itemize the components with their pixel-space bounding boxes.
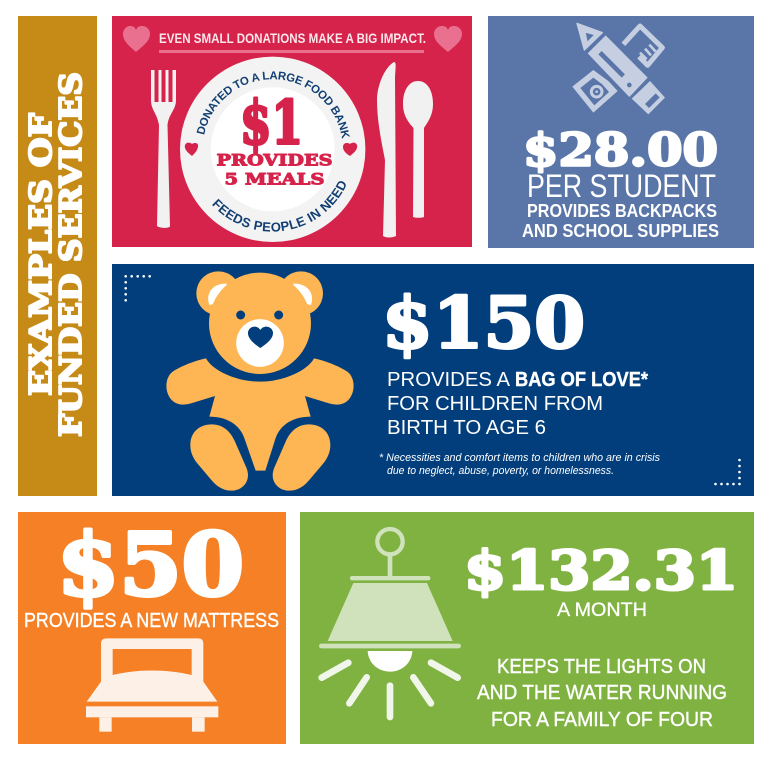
icon: plate heart right bbox=[343, 143, 357, 156]
per student: PER STUDENT bbox=[527, 168, 716, 204]
panel: sidebar bbox=[18, 16, 97, 496]
sidebar heading: EXAMPLES OF bbox=[24, 113, 59, 396]
amount: $150 bbox=[382, 282, 585, 364]
amount: $1 bbox=[240, 88, 303, 158]
footnote: * Necessities and comfort items to children who are in crisis bbox=[379, 452, 660, 464]
provides 5 meals: PROVIDES bbox=[216, 150, 332, 170]
description: PROVIDES A NEW MATTRESS bbox=[24, 610, 279, 632]
panel: utilities bbox=[300, 512, 754, 744]
description: FOR CHILDREN FROM bbox=[387, 393, 603, 415]
icon: plate heart left bbox=[185, 143, 198, 156]
panel: school supplies bbox=[488, 16, 754, 248]
description: FOR A FAMILY OF FOUR bbox=[491, 709, 713, 731]
provides 5 meals: 5 MEALS bbox=[224, 170, 324, 188]
description: PROVIDES A bbox=[387, 369, 511, 391]
icon: hanging lamp bbox=[319, 529, 461, 717]
a month: A MONTH bbox=[557, 600, 647, 621]
footnote: due to neglect, abuse, poverty, or homelessness. bbox=[387, 465, 614, 477]
description: BAG OF LOVE* bbox=[515, 369, 648, 391]
amount: $28.00 bbox=[523, 124, 718, 176]
icon: knife bbox=[377, 62, 396, 238]
icon: fork bbox=[151, 70, 176, 228]
icon: pencil and ruler bbox=[572, 23, 665, 114]
description: BIRTH TO AGE 6 bbox=[387, 417, 546, 439]
icon: spoon bbox=[403, 81, 433, 218]
decorative dots bottom right bbox=[714, 459, 741, 485]
heading: EVEN SMALL DONATIONS MAKE A BIG IMPACT. bbox=[159, 30, 426, 46]
description: AND SCHOOL SUPPLIES bbox=[522, 221, 719, 241]
sidebar heading bbox=[24, 72, 89, 437]
description: AND THE WATER RUNNING bbox=[477, 682, 727, 704]
plate bottom text: FEEDS PEOPLE IN NEED bbox=[212, 181, 346, 232]
icon: right heart bbox=[434, 26, 462, 52]
panel: mattress bbox=[18, 512, 286, 744]
footnote bbox=[379, 452, 660, 477]
plate top text: DONATED TO A LARGE FOOD BANK bbox=[196, 71, 350, 139]
amount: $132.31 bbox=[464, 540, 738, 602]
icon: teddy bear bbox=[166, 271, 354, 491]
panel: bag of love bbox=[112, 264, 754, 496]
provides 5 meals bbox=[216, 150, 332, 188]
description bbox=[522, 201, 719, 241]
description: PROVIDES BACKPACKS bbox=[527, 201, 717, 221]
description bbox=[387, 369, 648, 439]
description: KEEPS THE LIGHTS ON bbox=[497, 656, 706, 678]
sidebar heading: FUNDED SERVICES bbox=[54, 72, 89, 437]
description bbox=[477, 656, 727, 731]
decorative dots top left bbox=[124, 275, 151, 302]
panel: one dollar meals bbox=[112, 16, 472, 247]
plate bbox=[180, 56, 366, 242]
amount: $50 bbox=[57, 515, 244, 616]
icon: bed bbox=[86, 638, 218, 732]
icon: left heart bbox=[123, 26, 150, 52]
